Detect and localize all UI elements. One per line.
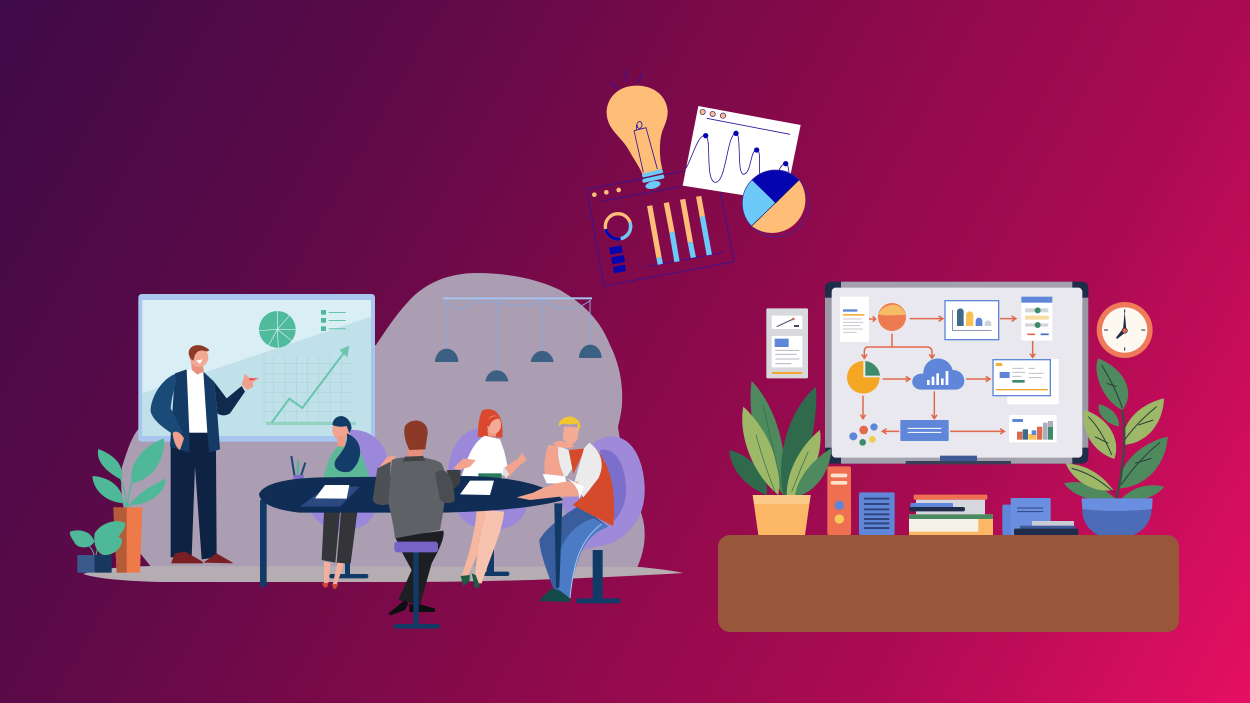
floor bbox=[83, 566, 683, 582]
pie chart bbox=[742, 170, 809, 237]
dashboard screen bbox=[993, 359, 1059, 404]
pinned note bbox=[766, 308, 808, 378]
right plant bbox=[1064, 358, 1168, 535]
presenter shoes bbox=[171, 552, 233, 563]
man on right, legs bbox=[538, 505, 608, 602]
presenter head bbox=[191, 360, 204, 375]
desk items and plants, in fifth zoom coordinates bbox=[729, 358, 1168, 535]
man with back to viewer bbox=[373, 421, 476, 629]
donut gauge bbox=[605, 214, 631, 239]
pen cup bbox=[291, 456, 305, 493]
orange pie bbox=[878, 303, 906, 331]
flow arrows bbox=[860, 316, 1035, 434]
seated group, in second zoom coordinates bbox=[259, 297, 645, 629]
bar chart bbox=[650, 196, 709, 264]
presenter side, in first zoom coordinates bbox=[70, 294, 375, 573]
list on screen bbox=[321, 310, 346, 331]
growth chart on screen bbox=[264, 346, 356, 425]
tall plant bbox=[92, 438, 166, 573]
line chart card bbox=[683, 106, 801, 202]
second paper bbox=[460, 481, 494, 495]
dashboard panel outline bbox=[587, 158, 734, 286]
whiteboard bbox=[825, 282, 1088, 464]
wall clock bbox=[1097, 302, 1153, 358]
small plant bbox=[70, 521, 126, 573]
pie chart on screen bbox=[259, 311, 296, 348]
room backdrop blob bbox=[121, 273, 645, 568]
presenter trousers bbox=[171, 433, 217, 559]
place mat and paper bbox=[300, 485, 360, 507]
settings card bbox=[1021, 297, 1052, 341]
meeting table bbox=[259, 476, 563, 587]
stack of books bbox=[909, 495, 993, 535]
report sheet bbox=[840, 297, 869, 342]
wall items, in fourth zoom coordinates bbox=[766, 282, 1153, 464]
coloured dots bbox=[849, 423, 878, 446]
folder and black box bbox=[1002, 498, 1078, 535]
presenter bbox=[151, 345, 259, 563]
woman at left bbox=[322, 416, 373, 589]
legend blocks bbox=[609, 245, 626, 273]
chair: left bbox=[310, 430, 387, 578]
presenter arms bbox=[151, 374, 183, 436]
desk bbox=[718, 535, 1179, 632]
chair: right bbox=[562, 436, 645, 603]
lightbulb bbox=[607, 70, 668, 190]
ideas and data cluster, in third zoom coordinates bbox=[587, 70, 809, 286]
bar chart card bbox=[1009, 415, 1057, 442]
presenter jacket bbox=[170, 369, 220, 453]
chair: centre bbox=[448, 428, 527, 576]
blue notebook bbox=[859, 492, 895, 535]
blue label box bbox=[900, 420, 949, 441]
meeting room scene bbox=[70, 273, 683, 629]
office scene bbox=[718, 282, 1179, 632]
hanging lamps bbox=[435, 297, 602, 381]
tall red binder bbox=[827, 466, 851, 535]
left plant bbox=[729, 381, 831, 535]
bar panel bbox=[945, 301, 999, 340]
presentation screen bbox=[138, 294, 375, 442]
man on right, torso bbox=[517, 417, 614, 526]
presenter shirt bbox=[186, 369, 208, 433]
woman at centre bbox=[461, 409, 527, 588]
cloud with bars bbox=[912, 359, 964, 390]
bigger pie bbox=[847, 361, 880, 394]
